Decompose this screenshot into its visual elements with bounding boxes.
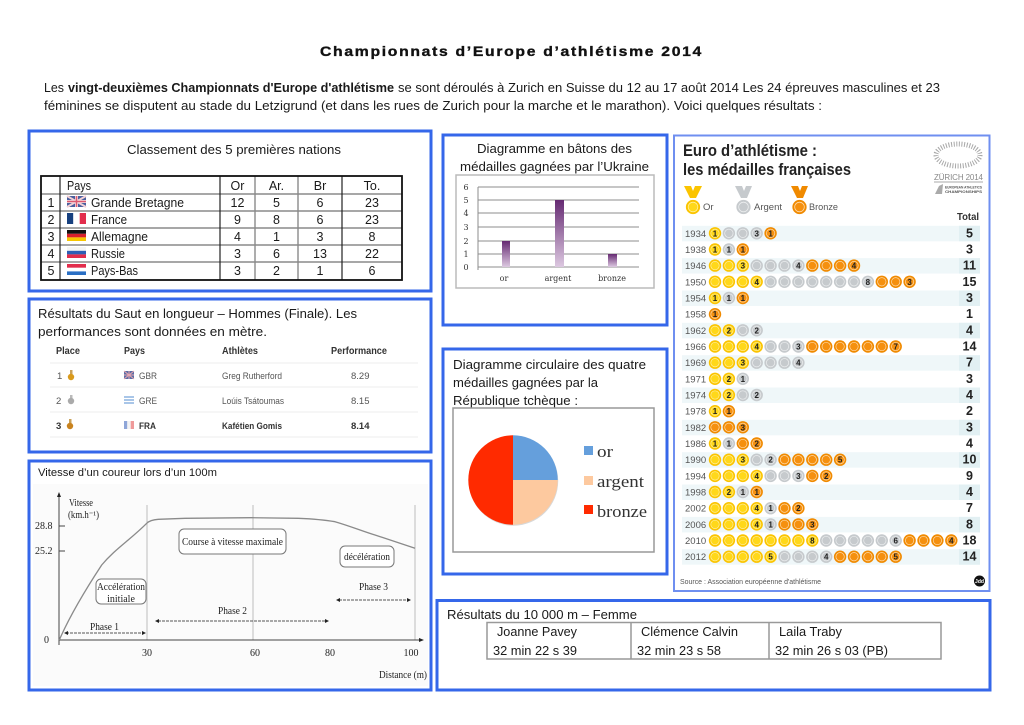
table: nations: 4 [48,247,55,261]
table: 10 000 m: Clémence Calvin [641,624,738,639]
row: 1998: 1998 [685,488,706,498]
row: 1978 [685,404,973,418]
row: 1974: 1974 [685,390,706,402]
row: 2006: 3 [810,520,815,529]
row: 2012: 2012 [685,552,706,563]
heading: médailles françaises [683,142,851,179]
table: nations: Pays [67,179,91,193]
row: 1978: 1 [727,407,732,416]
heading: bâtons: médailles gagnées par l’Ukraine [460,159,649,174]
row: 1998: 2 [727,488,732,497]
row: 2010 [685,534,976,548]
logo: Zürich 2014: EUROPEAN ATHLETICS [945,186,983,190]
legend: camembert: argent [597,472,644,491]
chart: bâtons Ukraine: bronze [598,274,626,283]
panel: diagramme en bâtons [443,135,667,325]
row: 1934 [682,226,980,241]
row: 1962: 2 [754,326,759,335]
chart: courbe de vitesse [33,484,428,686]
chart: bâtons Ukraine: 1 [463,250,469,259]
legend: camembert: bronze [597,502,647,521]
table: résultats du saut: Place [56,346,80,357]
row: 1938: 1 [713,246,718,254]
row: 1934: 3 [754,229,759,238]
chart: courbe de vitesse: 80 [325,648,335,659]
chart: bâtons Ukraine: argent [545,274,572,283]
heading: médailles françaises: Euro d’athlétisme : [683,142,817,160]
row: 1986 [685,436,973,450]
row: 1962: 4 [966,323,973,337]
introduction text [44,80,940,113]
heading: bâtons [460,141,649,174]
heading: 10 000 m: Résultats du 10 000 m – Femme [447,607,637,622]
heading: saut en longueur: Résultats du Saut en longueur – Hommes (Finale). Les [38,306,357,321]
row: 1950: 1950 [685,277,706,288]
callout: accélération initiale: initiale [107,594,135,605]
row: 1966: 3 [796,342,801,352]
chart: courbe de vitesse: Vitesse [69,498,93,509]
arrow: phase 3 [336,582,411,602]
row: 1969: 1969 [685,358,706,369]
row: 1994: 1994 [685,471,706,482]
icon: médaille argent [68,395,74,404]
panel: diagramme circulaire [443,349,667,574]
logo: Zürich 2014: CHAMPIONSHIPS [945,189,982,194]
row: 1969: 4 [796,359,801,368]
row: 1950: 15 [963,275,976,289]
row: 2002: 7 [966,501,973,515]
chart: courbe de vitesse: 60 [250,648,260,659]
icon: médaille or [68,370,74,380]
row: 2010: 18 [963,534,976,548]
panel: classement des nations [29,131,431,291]
row: 1946 [682,258,980,274]
row: 1938: 1938 [685,245,706,256]
arrow: phase 1 [64,622,146,635]
arrow: phase 1: Phase 1 [90,622,119,633]
table: résultats du saut: 8.29 [351,371,370,382]
arrow: phase 2 [155,606,329,623]
row: 1974: 2 [754,391,759,400]
introduction text: féminines se disputent au stade du Letzigrund (et dans les rues de Zurich pour la marche et le marathon). Voici quelques résultats : [44,98,822,113]
row: 1986: 1986 [685,439,706,450]
row: 1962: 2 [727,326,732,335]
chart: bâtons Ukraine [456,175,654,288]
chart: bâtons Ukraine: 3 [463,223,469,232]
table: nations: 6 [317,213,324,227]
table: résultats du saut: Kafétien Gomis [222,421,282,432]
table: nations: 3 [48,230,55,244]
row: 1982 [682,420,980,435]
introduction text: se sont déroulés à Zurich en Suisse du 12 au 17 août 2014 Les 24 épreuves masculines et 23 [398,80,940,95]
table: résultats du saut: Performance [331,346,387,357]
logo: Zürich 2014 [934,144,984,194]
chart: bâtons Ukraine: 2 [463,237,469,246]
table: nations: 8 [273,213,280,227]
row: 1950: 8 [866,278,871,287]
table: nations: Ar. [269,179,284,193]
row: 1969: 7 [966,356,973,370]
heading: saut en longueur [38,306,357,339]
row: 1958 [685,307,973,321]
callout: accélération initiale: Accélération [97,582,145,593]
arrow: phase 2: Phase 2 [218,606,247,617]
table: nations: Allemagne [91,230,148,244]
row: 2006: 8 [966,517,973,531]
row: 1938 [685,242,973,256]
row: 1990: 5 [838,456,843,465]
row: 1986: 1 [727,440,732,448]
row: 1998 [682,484,980,500]
flag: FRA [124,421,134,429]
row: 1971: 1 [741,375,746,384]
row: 1978: 2 [966,404,973,418]
chart: courbe de vitesse: 30 [142,648,152,659]
row: 1994: 3 [796,472,801,481]
table: nations: France [91,213,127,227]
row: 1950 [685,275,976,289]
row: 1986: 2 [754,440,759,448]
row: 1938: 1 [727,246,732,254]
row: 1974 [682,388,980,403]
chart: courbe de vitesse: 25.2 [35,546,52,557]
row: 1950: 3 [907,278,912,287]
heading: bâtons: Diagramme en bâtons des [477,141,632,156]
row: 1958: 1 [966,307,973,321]
panel: résultats 10 000 m [437,600,990,690]
row: 1974: 4 [966,388,973,402]
heading: médailles françaises: les médailles françaises [683,161,851,179]
table: nations: 3 [234,264,241,278]
row: 1954: 1 [741,294,746,303]
row: 1990: 10 [963,453,976,467]
chart: courbe de vitesse: 0 [44,635,49,646]
chart: courbe de vitesse: 100 [404,648,418,659]
row: 1946: 3 [741,262,746,271]
table: nations: 5 [273,196,280,210]
heading: classement: Classement des 5 premières nations [127,142,341,157]
row: 2006: 2006 [685,520,706,531]
legend: médailles: Or [703,202,714,213]
row: 1986: 1 [713,440,718,448]
flag: GBR [124,371,134,379]
row: 1938: 1 [741,246,746,254]
row: 1998: 1 [754,488,759,497]
row: 2006 [682,517,980,532]
callout: course à vitesse maximale [179,529,286,554]
table: résultats du saut: FRA [139,421,156,432]
chart: camembert [453,408,654,552]
row: 1994: 9 [966,469,973,483]
row: 2012: 14 [963,550,976,564]
table: nations: 2 [48,213,55,227]
row: 2002: 2002 [685,504,706,515]
row: 2002: 2 [796,504,801,513]
table: 10 000 m: Joanne Pavey [497,624,577,639]
row: 1971 [685,372,973,386]
row: 1971: 2 [727,375,732,384]
icon: médaille bronze [67,419,73,429]
table: nations: 1 [273,230,280,244]
label: total: Total [957,212,979,223]
row: 1978: 1978 [685,407,706,418]
row: 1954: 1 [713,294,718,303]
table: résultats du saut: 3 [56,421,61,432]
panel: saut en longueur [29,299,431,452]
table: nations: 9 [234,213,241,227]
chart: bâtons Ukraine: 5 [463,196,469,205]
row: 2010: 2010 [685,536,706,547]
introduction text: Les [44,80,64,95]
row: 1962: 1962 [685,326,706,337]
row: 2012: 4 [824,553,829,562]
table: résultats du saut: GBR [139,371,157,382]
row: 1934: 5 [966,226,973,240]
table: nations: 6 [273,247,280,261]
table: résultats du saut [50,346,418,437]
table: 10 000 m: Laila Traby [779,624,842,639]
chart: bâtons Ukraine: 6 [463,183,469,192]
row: 2002: 1 [768,504,773,513]
arrow: phase 3: Phase 3 [359,582,388,593]
table: nations: 23 [365,213,379,227]
table: nations: 22 [365,247,379,261]
panel: vitesse d'un coureur [29,461,431,690]
row: 2006: 4 [754,520,759,529]
row: 2002 [685,501,973,515]
table: nations [41,176,402,280]
row: 1986: 4 [966,436,973,450]
legend: camembert: or [597,442,613,461]
row: 1966: 4 [754,342,759,352]
row: 1994 [685,469,973,483]
row: 1966: 14 [963,340,976,354]
row: 2006: 1 [768,520,773,529]
table: résultats du saut: 2 [56,396,61,407]
table: résultats du saut: GRE [139,396,157,407]
heading: circulaire: République tchèque : [453,393,578,408]
row: 1946: 1946 [685,261,706,272]
table: nations: 3 [234,247,241,261]
table: nations: 23 [365,196,379,210]
row: 1946: 4 [852,262,857,271]
row: 1954: 1954 [685,294,706,304]
chart: courbe de vitesse: (km.h⁻¹) [68,510,99,521]
row: 2010: 6 [893,536,898,546]
row: 1971: 1971 [685,374,706,385]
row: 2010: 8 [810,536,815,546]
table: nations: 6 [317,196,324,210]
table: nations: Or [231,179,244,193]
row: 1994: 4 [754,472,759,481]
heading: saut en longueur: performances sont données en mètre. [38,324,267,339]
row: 1934: 1 [768,229,773,238]
table: nations: Pays-Bas [91,264,138,278]
flag: Pays-Bas [67,264,86,275]
table: résultats du saut: 1 [57,371,62,382]
callout: décélération [340,546,394,567]
table: nations: 13 [313,247,327,261]
table: nations: Russie [91,247,125,261]
row: 2010: 4 [949,536,954,546]
row: 1978: 1 [713,407,718,416]
legend: médailles: Argent [754,202,782,213]
row: 1966: 1966 [685,342,706,353]
row: 1938: 3 [966,242,973,256]
heading: vitesse: Vitesse d’un coureur lors d’un 100m [38,467,217,479]
row: 1990: 1990 [685,455,706,466]
row: 1958: 1958 [685,310,706,321]
chart: bâtons Ukraine: 4 [463,209,469,218]
row: 1966: 7 [893,342,898,352]
table: résultats du saut: Athlètes [222,346,258,357]
row: 1946: 11 [963,259,976,273]
table: nations: 4 [234,230,241,244]
row: 1966 [685,340,976,354]
table: 10 000 m: 32 min 22 s 39 [493,643,577,658]
flag: Royaume-Uni [67,196,86,207]
table: 10 000 m: 32 min 26 s 03 (PB) [775,643,888,658]
row: 2012: 5 [768,553,773,562]
table: résultats du saut: Greg Rutherford [222,371,282,382]
row: 1994: 2 [824,472,829,481]
chart: courbe de vitesse: 28.8 [35,521,52,532]
table: résultats du saut: 8.15 [351,396,370,407]
legend: médailles [684,186,838,214]
flag: GRE [124,396,134,404]
chart: bâtons Ukraine: 0 [463,263,469,272]
row: 1950: 4 [754,278,759,287]
source: Source : Association européenne d'athlétisme [680,577,821,586]
table: nations: 12 [231,196,244,210]
row: 1982: 1982 [685,423,706,434]
callout: accélération initiale [96,579,146,605]
legend: médailles: Bronze [809,202,838,213]
heading: circulaire: médailles gagnées par la [453,375,599,390]
table: nations: 3 [317,230,324,244]
row: 1998: 1 [741,488,746,497]
row: 1969 [682,355,980,371]
legend: camembert [584,442,647,521]
panel: médailles françaises [674,136,990,591]
row: 1962 [682,323,980,338]
table: nations: 8 [369,230,376,244]
flag: France [67,213,86,224]
row: 2012: 5 [893,553,898,562]
table: résultats du saut: Loúis Tsátoumas [222,396,284,407]
table: nations: 1 [317,264,324,278]
table: 10 000 m: 32 min 23 s 58 [637,643,721,658]
table: 10 000 m [487,622,941,659]
table: nations: 2 [273,264,280,278]
table: nations: 6 [369,264,376,278]
row: 1946: 4 [796,262,801,271]
logo: Zürich 2014: ZÜRICH 2014 [934,173,984,182]
row: 1982: 3 [741,423,746,432]
heading: circulaire [453,357,646,408]
table: nations: To. [364,179,380,193]
icon: logo presse: Jdd [975,579,984,585]
row: 1990 [682,452,980,468]
table: résultats du saut: Pays [124,346,145,357]
table: nations: Br [314,179,326,193]
row: 1954: 1 [727,294,732,303]
row: 1982: 3 [966,420,973,434]
introduction text: vingt-deuxièmes Championnats d'Europe d'athlétisme [68,80,394,95]
chart: bâtons Ukraine: or [500,274,508,283]
row: 1969: 3 [741,359,746,368]
row: 1990: 2 [768,456,773,465]
callout: décélération: décélération [344,552,390,563]
table: nations: 1 [48,196,55,210]
row: 1974: 2 [727,391,732,400]
row: 1934: 1934 [685,229,706,240]
table: nations: Grande Bretagne [91,196,184,210]
row: 2012 [682,549,980,565]
flag: Allemagne [67,230,86,241]
icon: logo presse [974,576,985,586]
title: Championnats d’Europe d’athlétisme 2014 [320,43,703,59]
row: 1998: 4 [966,485,973,499]
flag: Russie [67,247,86,258]
row: 2002: 4 [754,504,759,513]
table: résultats du saut: 8.14 [351,421,370,432]
row: 1971: 3 [966,372,973,386]
row: 1954: 3 [966,291,973,305]
table: nations: 5 [48,264,55,278]
heading: circulaire: Diagramme circulaire des quatre [453,357,646,372]
row: 1954 [682,290,980,306]
callout: course à vitesse maximale: Course à vitesse maximale [182,537,284,548]
chart: courbe de vitesse: Distance (m) [379,670,427,681]
row: 1958: 1 [713,310,718,319]
row: 1934: 1 [713,229,718,238]
row: 1990: 3 [741,456,746,465]
